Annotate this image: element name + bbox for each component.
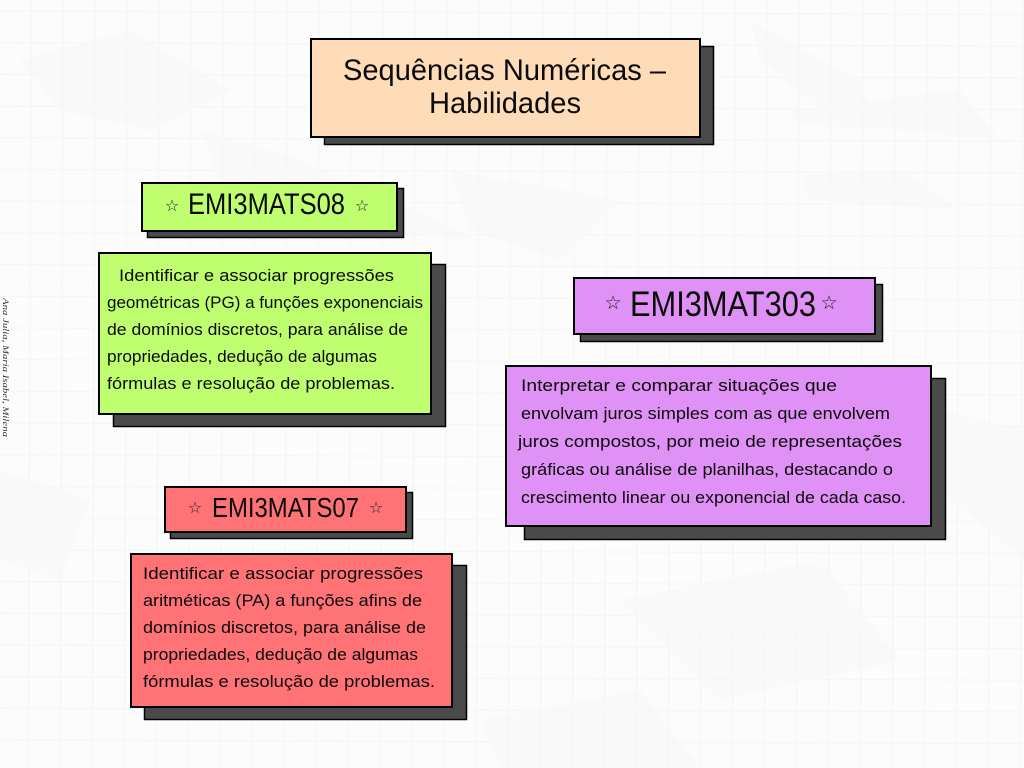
panel: EM13MAT303 heading: EMI3MAT303 [630, 285, 816, 324]
panel: EM13MATS07 heading: EMI3MATS07 [212, 492, 359, 523]
panel: EM13MATS08 heading: ☆ [165, 196, 179, 215]
panel: EM13MATS07 heading: ☆ [188, 498, 202, 517]
panel: EM13MATS08 description: fórmulas e resolução de problemas. [107, 375, 395, 393]
panel: EM13MATS07 description: propriedades, dedução de algumas [143, 646, 418, 664]
panel: EM13MATS07 description [131, 554, 466, 720]
panel: EM13MAT303 heading [574, 278, 882, 342]
panel: EM13MAT303 description: crescimento linear ou exponencial de cada caso. [521, 489, 906, 507]
panel: EM13MAT303 description: Interpretar e comparar situações que [521, 377, 837, 395]
panel: EM13MATS07 heading [165, 487, 412, 538]
panel: EM13MATS07 description: aritméticas (PA) a funções afins de [143, 592, 422, 610]
panel: EM13MAT303 heading: ☆ [820, 292, 838, 314]
panel: EM13MATS07 heading: ☆ [369, 498, 383, 517]
panel: EM13MATS08 description [99, 253, 446, 426]
panel: EM13MATS08 description: de domínios discretos, para análise de [107, 321, 408, 339]
panel: EM13MATS08 description: geométricas (PG) a funções exponenciais [107, 294, 423, 312]
author credit: Ana Julia, Maria Isabel, Milena [1, 297, 10, 437]
panel: EM13MAT303 description [506, 366, 946, 540]
panel: EM13MAT303 description: gráficas ou análise de planilhas, destacando o [521, 461, 893, 479]
title: Habilidades [429, 87, 581, 120]
panel: EM13MATS08 heading: ☆ [355, 196, 369, 215]
panel: EM13MATS08 description: propriedades, dedução de algumas [107, 348, 377, 366]
panel: EM13MATS07 description: fórmulas e resolução de problemas. [143, 673, 435, 691]
panel: EM13MATS08 heading [142, 183, 404, 238]
panel: EM13MAT303 description: envolvam juros simples com as que envolvem [521, 405, 890, 423]
title: Sequências Numéricas – [343, 54, 666, 87]
title [311, 39, 714, 144]
panel: EM13MATS07 description: Identificar e associar progressões [143, 565, 423, 583]
panel: EM13MATS08 description: Identificar e associar progressões [119, 267, 394, 285]
panel: EM13MAT303 heading: ☆ [604, 292, 622, 314]
panel: EM13MATS07 description: domínios discretos, para análise de [143, 619, 426, 637]
panel: EM13MAT303 description: juros compostos, por meio de representações [517, 433, 902, 451]
panel: EM13MATS08 heading: EMI3MATS08 [188, 188, 345, 221]
